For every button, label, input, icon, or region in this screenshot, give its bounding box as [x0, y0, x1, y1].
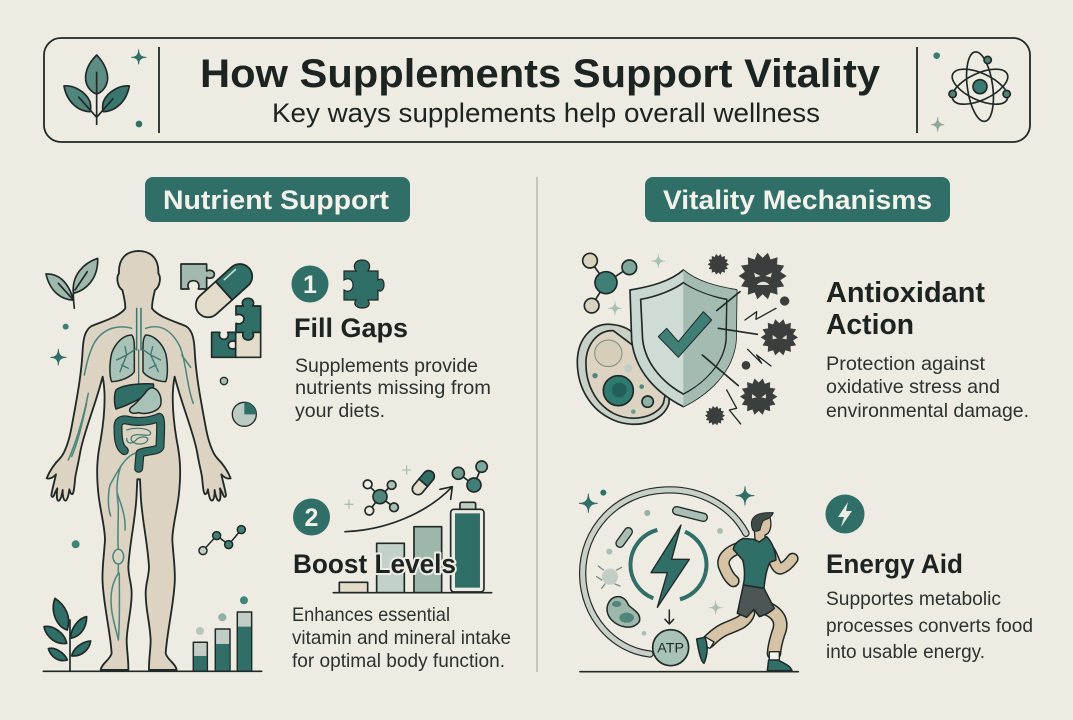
illustration: energy and runner	[579, 487, 798, 672]
arrow	[345, 487, 452, 532]
icon: puzzle cluster	[212, 298, 261, 357]
illustration: rising levels	[333, 461, 492, 593]
heading: Nutrient Support	[145, 177, 410, 222]
subtitle: Key ways supplements help overall wellness	[272, 98, 820, 128]
sparkles	[608, 254, 665, 315]
heading: Boost Levels: Boost Levels	[293, 549, 456, 579]
icon: line graph	[199, 526, 245, 555]
text: boost levels description: Enhances essential	[292, 604, 450, 626]
text: boost levels description: for optimal body function.	[292, 650, 505, 672]
back arm	[724, 548, 738, 581]
molecule	[363, 480, 398, 515]
large intestine	[118, 417, 161, 468]
socks and shoes	[703, 637, 779, 662]
text: energy description: Supportes metabolic	[826, 588, 1001, 610]
heading: Vitality Mechanisms	[645, 177, 950, 222]
text: fill gaps description: nutrients missing from	[295, 377, 491, 399]
runner	[697, 513, 793, 671]
text: boost levels description: vitamin and mineral intake	[292, 627, 511, 649]
repelled rays	[702, 292, 757, 386]
icons around the body	[43, 258, 262, 671]
molecule	[583, 253, 637, 313]
blood vessels	[68, 327, 193, 640]
cell ring	[583, 490, 746, 654]
cell	[577, 324, 670, 424]
body silhouette	[47, 251, 231, 670]
icon: teal dot	[72, 540, 80, 548]
sparkles	[579, 487, 754, 512]
text: antioxidant description	[826, 353, 1029, 422]
icon: pie chart	[232, 402, 256, 426]
icon: energy badge	[826, 494, 864, 534]
trachea and bronchi	[117, 308, 161, 383]
heading: Antioxidant Action	[826, 277, 985, 341]
sparkles	[345, 466, 411, 508]
heading: Fill Gaps: Fill Gaps	[294, 313, 408, 343]
small intestine	[127, 428, 151, 444]
text: energy description	[826, 588, 1033, 663]
battery	[451, 502, 484, 592]
step 1: fill gaps	[292, 260, 491, 422]
icon: plant	[44, 598, 91, 671]
lungs	[110, 335, 167, 382]
arrow down	[665, 610, 674, 624]
lightning marks	[727, 308, 776, 424]
liver	[114, 384, 154, 409]
text: energy description: processes converts food	[826, 615, 1033, 637]
text: antioxidant description: environmental damage.	[826, 400, 1029, 422]
hair	[751, 513, 773, 531]
energy bolt ring	[630, 525, 706, 607]
heading: Antioxidant Action: Antioxidant	[826, 277, 985, 309]
text: antioxidant description: oxidative stress and	[826, 376, 1000, 398]
heading: Vitality Mechanisms: Vitality Mechanisms	[663, 185, 932, 215]
front leg	[767, 608, 780, 653]
stomach	[130, 388, 161, 413]
ATP badge	[653, 630, 689, 666]
icon: small dot	[63, 324, 69, 330]
torso	[733, 537, 776, 588]
heading: Antioxidant Action: Action	[826, 309, 914, 341]
icon: leaves	[64, 50, 146, 127]
icon: puzzle piece	[181, 264, 214, 289]
illustration: human body anatomy	[47, 251, 231, 670]
icon: sparkle	[51, 349, 66, 365]
icon: capsule	[191, 259, 257, 322]
number badge 2	[293, 498, 330, 536]
rear leg	[708, 613, 748, 642]
number badge 1: 1	[303, 271, 317, 299]
icon: ring dot	[220, 377, 228, 385]
ground line	[580, 669, 798, 674]
molecule right	[452, 461, 487, 492]
shorts	[737, 585, 774, 617]
front arm	[770, 552, 793, 569]
number badge 1	[292, 266, 328, 302]
text: fill gaps description	[295, 355, 491, 422]
icon: puzzle piece	[344, 260, 384, 308]
text block: energy aid	[826, 494, 1033, 663]
number badge 2: 2	[305, 504, 318, 532]
capsule	[410, 468, 437, 497]
text: boost levels description	[292, 604, 511, 672]
ATP badge: ATP	[657, 640, 684, 656]
free radicals	[705, 253, 798, 425]
panel: header	[44, 38, 1030, 142]
icon: atom	[931, 50, 1013, 131]
icon: leaf pair	[46, 258, 98, 308]
text: antioxidant description: Protection against	[826, 353, 986, 375]
text: fill gaps description: your diets.	[295, 400, 385, 422]
heading: Nutrient Support: Nutrient Support	[163, 185, 389, 215]
rising bars	[339, 527, 442, 593]
illustration: antioxidant shield	[577, 253, 798, 425]
heading: Energy Aid: Energy Aid	[826, 549, 963, 579]
text block: antioxidant action	[826, 277, 1029, 422]
step 2: boost levels	[292, 461, 511, 672]
text: fill gaps description: Supplements provide	[295, 355, 478, 377]
shield	[630, 270, 737, 407]
organelles	[597, 490, 723, 636]
title: How Supplements Support Vitality	[200, 52, 881, 96]
text: energy description: into usable energy.	[826, 641, 985, 663]
neck and face	[754, 517, 771, 543]
center divider	[536, 177, 538, 672]
bar chart	[43, 596, 262, 671]
